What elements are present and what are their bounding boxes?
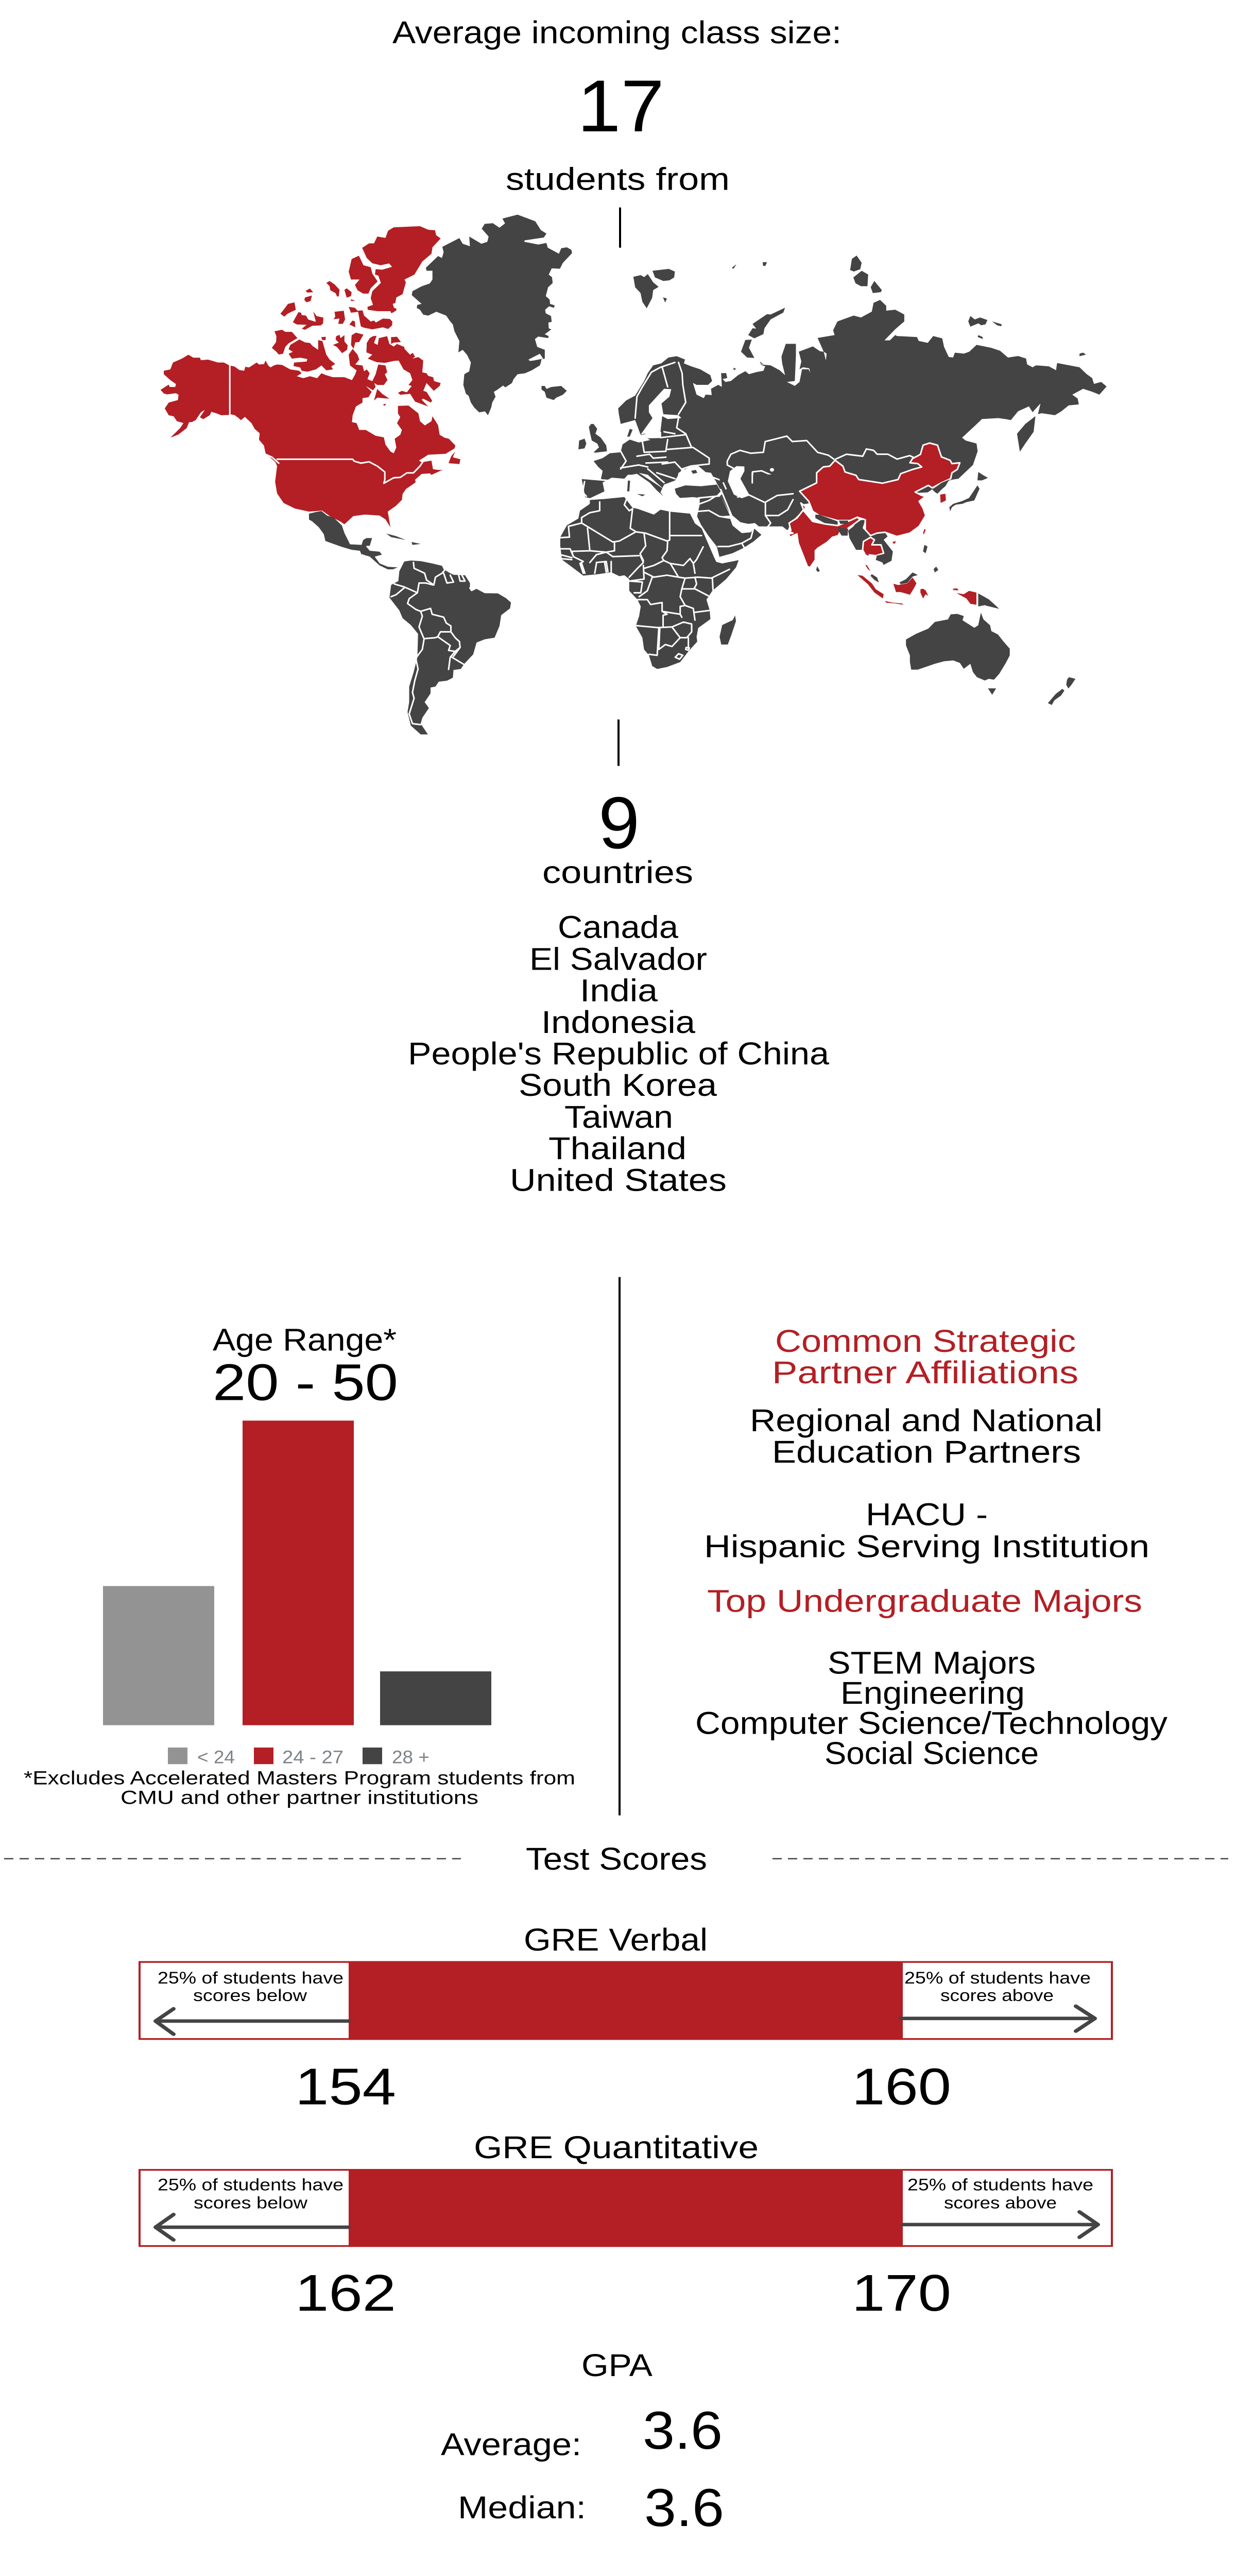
- label: lower quartile: scores below: [194, 2194, 308, 2212]
- country list: United States: [510, 1163, 727, 1198]
- list: majors: Social Science: [825, 1736, 1039, 1771]
- panel: age range: [24, 1323, 575, 1808]
- world map: [161, 215, 1107, 734]
- arrow: right: [903, 2212, 1098, 2238]
- heading: top undergraduate majors: Top Undergraduate Majors: [707, 1584, 1142, 1619]
- label: lower quartile: 25% of students have: [158, 1969, 344, 1987]
- label: average: Average:: [441, 2428, 581, 2462]
- text: HACU: [704, 1497, 1149, 1564]
- map region: mexico, central america, south america and africa: [309, 497, 739, 734]
- number: median GPA: 3.6: [644, 2478, 724, 2537]
- number: 170: 170: [852, 2264, 951, 2322]
- text: regional and national education partners: Education Partners: [772, 1435, 1081, 1470]
- heading: GPA: GPA: [581, 2348, 653, 2383]
- label: upper quartile: 25% of students have: [904, 1969, 1091, 1987]
- divider: vertical line between age and affiliations: [619, 1277, 621, 1816]
- footnote: CMU and other partner institutions: [121, 1787, 478, 1808]
- heading: test scores with dashed rules: Test Scores: [526, 1842, 707, 1877]
- legend: age groups: [168, 1748, 430, 1768]
- list: majors: Engineering: [840, 1676, 1025, 1711]
- panel: GRE verbal: [140, 1923, 1112, 2115]
- text: countries: countries: [542, 855, 693, 890]
- panel: class size header: [392, 15, 842, 248]
- arrow: left: [156, 2214, 349, 2240]
- text: regional and national education partners: [750, 1403, 1103, 1470]
- label: upper quartile: [907, 2176, 1093, 2212]
- arrow: left: [156, 2009, 349, 2034]
- country list: People's Republic of China: [408, 1037, 830, 1072]
- panel: affiliations and majors: [695, 1324, 1168, 1771]
- label: lower quartile: scores below: [193, 1986, 307, 2005]
- label: lower quartile: 25% of students have: [158, 2176, 344, 2194]
- list: majors: Computer Science/Technology: [695, 1706, 1168, 1741]
- legend: age groups: < 24: [197, 1748, 235, 1768]
- label: upper quartile: scores above: [944, 2194, 1057, 2212]
- connector line: above map: [619, 208, 621, 248]
- text: regional and national education partners: Regional and National: [750, 1403, 1103, 1438]
- label: upper quartile: 25% of students have: [907, 2176, 1093, 2194]
- country list: Indonesia: [541, 1005, 696, 1040]
- arrow: right: [901, 2006, 1095, 2031]
- country list: El Salvador: [529, 942, 707, 977]
- list: majors: STEM Majors: [828, 1646, 1036, 1681]
- label: lower quartile: [158, 1969, 344, 2005]
- number: 162: 162: [295, 2264, 396, 2322]
- heading: common strategic partner affiliations: Partner Affiliations: [772, 1355, 1078, 1391]
- connector line: below map: [617, 720, 620, 766]
- text: students from: students from: [506, 162, 730, 197]
- legend: age groups: 28 +: [392, 1748, 430, 1768]
- map region: russia, europe, scandinavia and arctic islands: [578, 256, 1107, 501]
- footnote: [24, 1767, 575, 1808]
- heading: GRE verbal: GRE Verbal: [524, 1923, 708, 1958]
- number: 20 - 50: 20 - 50: [213, 1354, 398, 1411]
- number: 9 countries: 9: [598, 782, 640, 864]
- country list: Taiwan: [564, 1100, 673, 1135]
- range box: quantitative: [140, 2169, 1112, 2247]
- map region: middle east, asia, australia and pacific: [675, 443, 1075, 705]
- panel: countries: [408, 720, 830, 1198]
- country list: Canada: [558, 910, 679, 945]
- label: upper quartile: scores above: [940, 1986, 1054, 2005]
- list: majors: [695, 1646, 1168, 1771]
- legend: age groups: 24 - 27: [282, 1748, 344, 1768]
- map region: north america, greenland and iceland: [161, 215, 572, 527]
- label: lower quartile: [158, 2176, 344, 2212]
- number: 17 students: 17: [577, 65, 664, 147]
- country list: South Korea: [519, 1068, 717, 1103]
- panel: GRE quantitative: [140, 2130, 1112, 2322]
- country list: India: [580, 974, 658, 1008]
- label: median: Median:: [458, 2490, 586, 2526]
- country list: Thailand: [548, 1131, 686, 1166]
- heading: common strategic partner affiliations: [772, 1324, 1078, 1391]
- heading: common strategic partner affiliations: Common Strategic: [775, 1324, 1076, 1359]
- label: upper quartile: [904, 1969, 1091, 2005]
- heading: GRE quantitative: GRE Quantitative: [474, 2130, 759, 2165]
- heading: average incoming class size: Average incoming class size:: [392, 15, 842, 50]
- number: average GPA: 3.6: [643, 2400, 723, 2460]
- heading: age range: Age Range*: [213, 1323, 397, 1358]
- footnote: *Excludes Accelerated Masters Program students from: [24, 1767, 575, 1789]
- number: 160: 160: [852, 2058, 951, 2115]
- bar chart: age groups: [103, 1420, 491, 1725]
- panel: GPA: [441, 2348, 724, 2537]
- range box: verbal: [140, 1961, 1112, 2040]
- text: HACU: HACU -: [866, 1497, 988, 1532]
- text: HACU: Hispanic Serving Institution: [704, 1529, 1149, 1564]
- number: 154: 154: [295, 2058, 396, 2115]
- country list: [408, 910, 830, 1198]
